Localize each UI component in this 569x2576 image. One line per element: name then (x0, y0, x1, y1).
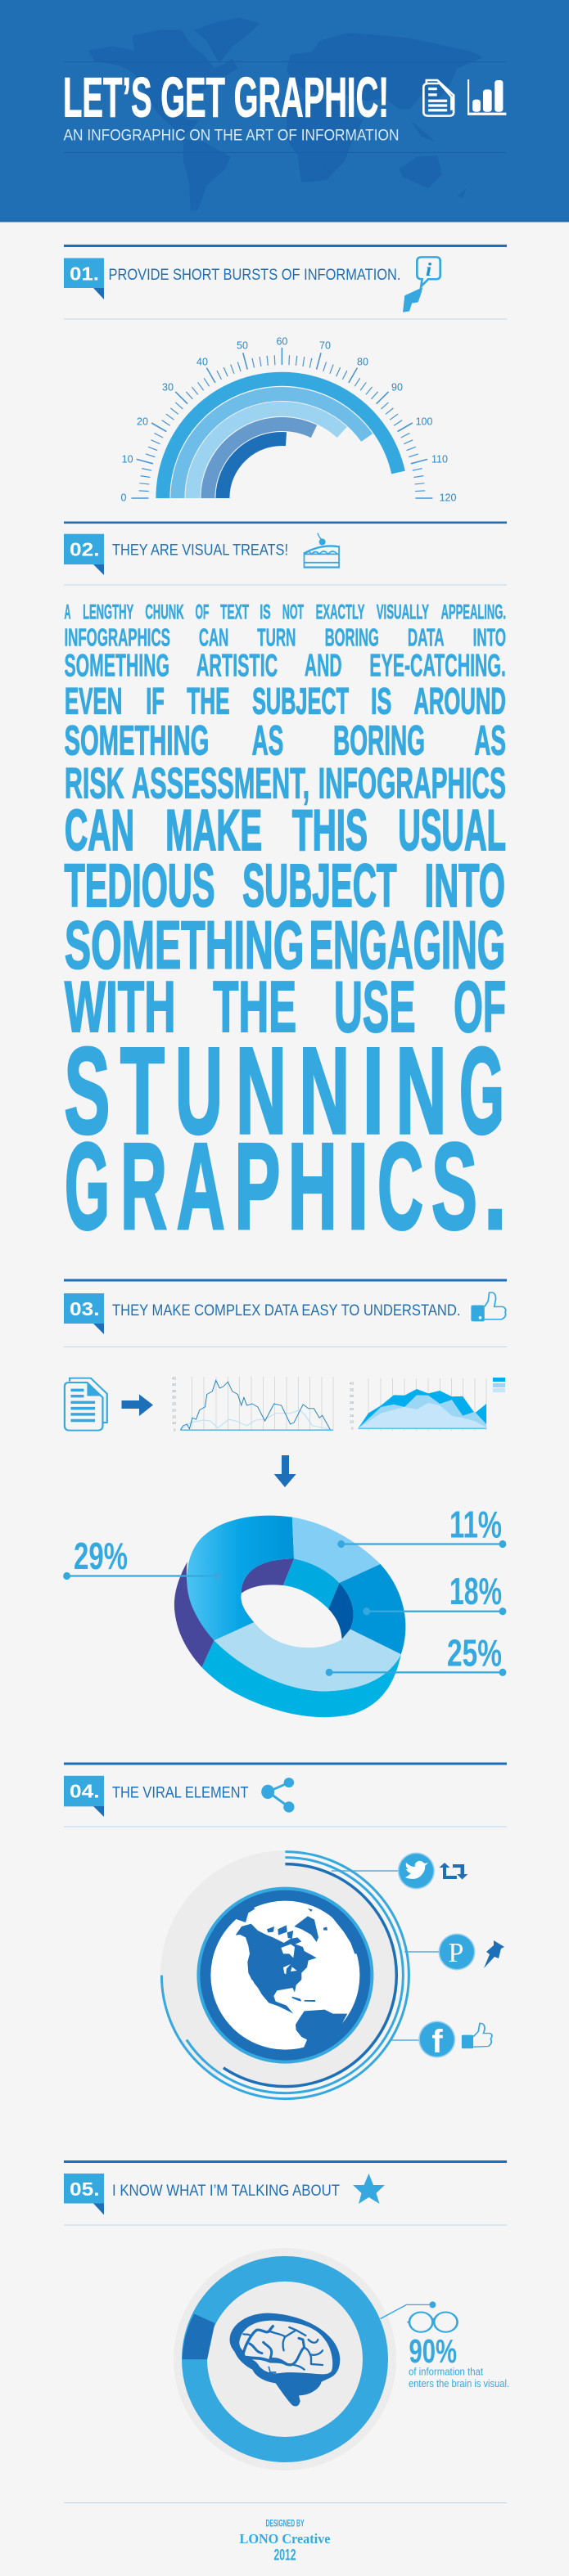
stat caption: enters the brain is visual. (409, 2378, 509, 2389)
area chart axis labels: 25 (350, 1400, 354, 1405)
lines 4 to 6: AS (252, 717, 283, 764)
lines 1 to 3: INFOGRAPHICS (64, 623, 170, 651)
donut shapes (63, 1516, 506, 1717)
lines 1 to 3: NOT (282, 600, 304, 623)
badge 02: 02. (70, 538, 100, 560)
lines 7 to 10: SOMETHING (65, 907, 304, 982)
section 05 header (64, 2160, 507, 2225)
word: GRAPHICS.: G (65, 1117, 110, 1255)
lines 4 to 6: AS (474, 717, 506, 764)
icon: document (65, 1378, 107, 1431)
lines 1 to 3: BORING (325, 623, 379, 651)
word: GRAPHICS.: C (377, 1117, 423, 1255)
area chart axis labels: 35 (350, 1387, 354, 1392)
lines 1 to 3: TEXT (220, 600, 249, 623)
lines 1 to 3: A (64, 600, 70, 623)
lines 4 to 6: IF (146, 680, 165, 722)
gauge labels: 20 (137, 416, 148, 427)
word: GRAPHICS.: I (347, 1117, 368, 1255)
area chart grid (368, 1378, 486, 1431)
area chart axis labels: 20 (350, 1407, 354, 1411)
lines 1 to 3: CAN (199, 623, 228, 651)
label 25%: 25% (447, 1631, 502, 1674)
lines 1 to 3: ARTISTIC (196, 649, 278, 684)
icon: bar chart (467, 79, 506, 115)
lines 7 to 10: SUBJECT (242, 852, 397, 920)
area chart (350, 1378, 505, 1431)
word: STUNNING: N (396, 1022, 447, 1159)
line chart axis labels: 40 (172, 1382, 177, 1387)
donut halo (174, 2248, 396, 2470)
icon: glasses (407, 2312, 458, 2332)
year: 2012 (273, 2547, 296, 2564)
icon: push pin (484, 1940, 504, 1968)
section 04 header (64, 1762, 507, 1827)
line chart axis labels: 30 (172, 1396, 177, 1399)
word: GRAPHICS.: H (288, 1117, 337, 1255)
lines 7 to 10: CAN (65, 798, 134, 863)
brain donut chart (174, 2248, 509, 2470)
word: STUNNING: U (175, 1022, 223, 1159)
lines 1 to 3: INTO (473, 623, 506, 651)
globe (196, 1887, 373, 2064)
arrow down (274, 1455, 296, 1487)
badge 01: 01. (70, 263, 99, 285)
lines 7 to 10: WITH (65, 966, 176, 1047)
gauge labels (121, 335, 456, 504)
connector lines (332, 1871, 440, 2040)
text block: justified typography paragraph (64, 600, 507, 1255)
word: STUNNING: I (363, 1022, 384, 1159)
word: STUNNING: T (120, 1022, 165, 1159)
lines 7 to 10: OF (454, 966, 506, 1047)
footer credits (64, 2502, 507, 2564)
line chart axis labels: 35 (172, 1389, 177, 1393)
line chart axis labels: 20 (172, 1409, 177, 1412)
panel: header banner (0, 0, 569, 223)
world map background (89, 18, 483, 210)
word: GRAPHICS.: R (120, 1117, 167, 1255)
designed by: DESIGNED BY (265, 2518, 305, 2529)
stat caption (409, 2366, 509, 2389)
icon: thumbs up (471, 1292, 506, 1321)
badge 03: 03. (70, 1298, 100, 1319)
area chart legend (493, 1378, 505, 1392)
gauge labels: 60 (276, 335, 287, 347)
badge 02 (64, 534, 104, 575)
gauge labels: 80 (357, 357, 368, 368)
lines 7 to 10: TEDIOUS (64, 852, 215, 920)
line chart (172, 1376, 333, 1432)
icon: thumbs up small (462, 2023, 492, 2048)
lines 1 to 3: LENGTHY (83, 600, 133, 623)
stat caption: of information that (409, 2366, 483, 2377)
lines 4 to 6 (64, 680, 506, 808)
word: GRAPHICS.: . (484, 1117, 507, 1255)
stat 90%: 90% (409, 2332, 457, 2370)
lines 4 to 6: BORING (333, 717, 425, 764)
gauge labels: 70 (319, 340, 331, 352)
label 18%: 18% (449, 1570, 502, 1612)
donut ring 90 percent (195, 2269, 375, 2449)
lines 7 to 10: THIS (292, 798, 368, 863)
area chart axis labels: 0 (351, 1427, 354, 1430)
globe with social rings (160, 1850, 504, 2100)
icon: twitter (398, 1852, 435, 1890)
lines 4 to 6: ASSESSMENT, (132, 759, 309, 808)
area chart axis labels (350, 1381, 354, 1430)
icon: brain (230, 2313, 340, 2406)
text: G (459, 1022, 504, 1159)
arrow right (121, 1394, 153, 1416)
icon: cake (304, 533, 339, 567)
section 01 header (64, 245, 507, 319)
lines 4 to 6: AROUND (413, 680, 506, 722)
badge 05: 05. (70, 2178, 100, 2200)
section 03 header (64, 1279, 507, 1347)
lines 7 to 10: THE (213, 966, 296, 1047)
icon: facebook: f (431, 2024, 443, 2060)
line chart axis labels: 45 (172, 1376, 177, 1381)
heading 02: THEY ARE VISUAL TREATS! (112, 542, 288, 560)
gauge labels: 40 (196, 357, 208, 368)
word: STUNNING: S (64, 1022, 110, 1159)
heading 04: THE VIRAL ELEMENT (112, 1785, 249, 1801)
heading 05: I KNOW WHAT I’M TALKING ABOUT (112, 2183, 340, 2200)
lines 1 to 3 (64, 600, 506, 684)
gauge ticks (131, 348, 432, 498)
gauge chart (121, 335, 456, 504)
icon: facebook (418, 2021, 455, 2060)
lines 4 to 6: SOMETHING (64, 717, 209, 764)
heading 01: PROVIDE SHORT BURSTS OF INFORMATION. (108, 267, 401, 284)
gauge labels: 110 (431, 453, 448, 465)
icon: pinterest: P (449, 1938, 463, 1968)
line chart axis labels (172, 1376, 177, 1432)
lines 4 to 6: INFOGRAPHICS (318, 759, 506, 808)
icon: star (353, 2174, 385, 2204)
badge 04: 04. (70, 1780, 100, 1801)
badge 04 (64, 1776, 104, 1817)
area chart axis labels: 40 (350, 1381, 354, 1386)
continents (233, 1904, 361, 2052)
area chart axis labels: 30 (350, 1394, 354, 1398)
lines 7 to 10: USE (334, 966, 416, 1047)
badge 05 (64, 2174, 104, 2215)
leader lines (67, 1544, 503, 1672)
word: GRAPHICS.: S (431, 1117, 477, 1255)
lines 7 to 10 (64, 798, 506, 1047)
studio name: LONO Creative (239, 2531, 331, 2547)
lines 1 to 3: TURN (257, 623, 296, 651)
section 02 header (64, 522, 507, 586)
lines 4 to 6: RISK (65, 759, 124, 808)
icon: pinterest (439, 1934, 475, 1970)
lines 4 to 6: THE (187, 680, 230, 722)
subtitle: AN INFOGRAPHIC ON THE ART OF INFORMATION (64, 126, 400, 144)
gauge labels: 10 (122, 453, 133, 465)
line chart grid (192, 1377, 333, 1430)
lines 1 to 3: IS (260, 600, 271, 623)
line chart axis labels: 25 (172, 1402, 177, 1405)
callout leader (381, 2301, 436, 2319)
word: STUNNING: N (236, 1022, 287, 1159)
icon: retweet (439, 1863, 468, 1880)
icon: info speech bubble from gun (403, 257, 440, 312)
line chart series (180, 1380, 333, 1430)
ring gap (220, 1858, 403, 2093)
lines 1 to 3: CHUNK (145, 600, 184, 623)
lines 1 to 3: SOMETHING (64, 649, 169, 684)
gauge labels: 90 (391, 381, 403, 393)
icon: share (261, 1778, 295, 1813)
gray disc (160, 1850, 410, 2100)
area chart series (359, 1389, 486, 1428)
lines 4 to 6: IS (371, 680, 391, 722)
word: GRAPHICS.: A (177, 1117, 225, 1255)
line chart axis labels: 0 (174, 1428, 176, 1432)
lines 7 to 10: MAKE (165, 798, 262, 863)
line chart axis labels: 10 (172, 1421, 177, 1425)
word: STUNNING: N (299, 1022, 350, 1159)
lines 4 to 6: SUBJECT (252, 680, 349, 722)
lines 1 to 3: VISUALLY (377, 600, 429, 623)
line chart axis labels: 15 (172, 1415, 177, 1418)
leader dots (63, 1540, 506, 1676)
gauge arcs (163, 379, 399, 498)
heading 03: THEY MAKE COMPLEX DATA EASY TO UNDERSTAND. (112, 1302, 460, 1319)
icon: document (423, 80, 454, 116)
lines 1 to 3: APPEALING. (441, 600, 506, 623)
lines 1 to 3: AND (305, 649, 342, 684)
area chart axis labels: 15 (350, 1414, 354, 1418)
gauge labels: 0 (121, 492, 127, 504)
word: GRAPHICS.: P (234, 1117, 280, 1255)
data flow: document to charts (65, 1376, 505, 1487)
area chart axis labels: 10 (350, 1420, 354, 1423)
lines 1 to 3: EYE-CATCHING. (369, 649, 506, 684)
badge 03 (64, 1293, 104, 1334)
header rules (64, 61, 506, 153)
lines 1 to 3: DATA (408, 623, 445, 651)
lines 1 to 3: OF (195, 600, 209, 623)
gauge labels: 120 (440, 492, 456, 504)
lines 7 to 10: INTO (425, 852, 505, 920)
icon: info speech bubble from gun: i (426, 259, 431, 281)
gauge labels: 100 (416, 416, 432, 427)
badge 01 (64, 258, 104, 299)
gauge labels: 30 (162, 381, 174, 393)
lines 1 to 3: EXACTLY (316, 600, 365, 623)
orbit rings (161, 1852, 409, 2099)
label 29%: 29% (74, 1535, 128, 1577)
lines 4 to 6: EVEN (65, 680, 122, 722)
lines 7 to 10: USUAL (398, 798, 506, 863)
3D donut chart (63, 1504, 506, 1717)
gauge labels: 50 (237, 340, 248, 352)
donut segment 10 percent (183, 2314, 215, 2359)
label 11%: 11% (449, 1504, 502, 1546)
